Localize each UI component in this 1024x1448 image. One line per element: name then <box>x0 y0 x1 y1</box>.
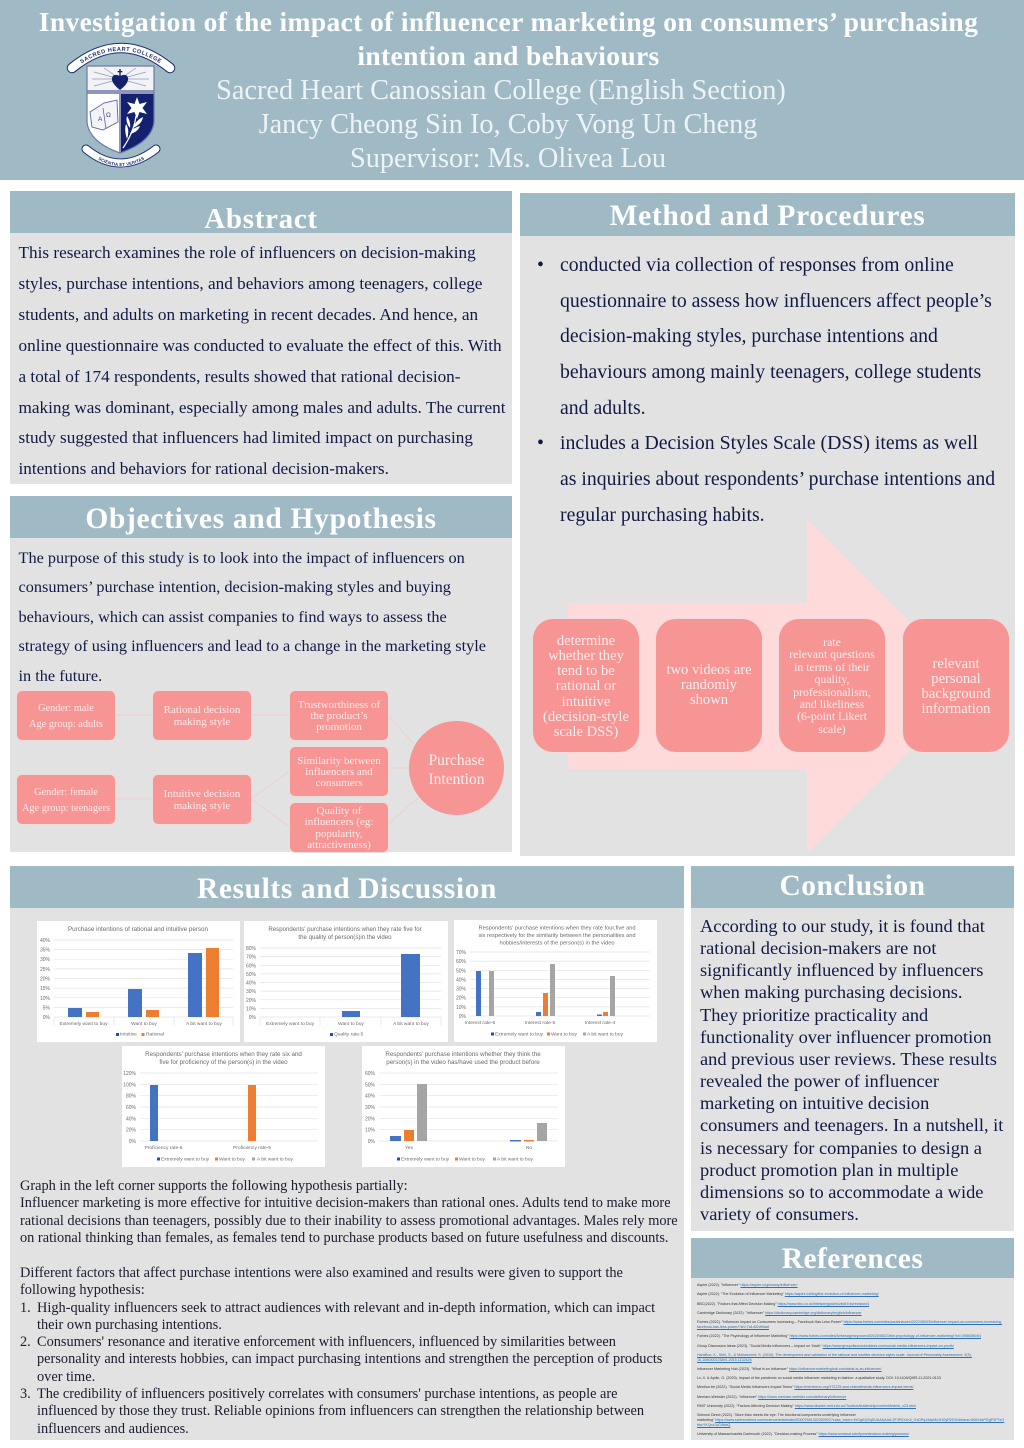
step: decision style scale: intuitive <box>562 694 610 710</box>
chart 3: similarity rate four, five, six: Extremely want to buy <box>495 1032 544 1038</box>
abstract heading <box>10 191 512 233</box>
chart 5: used the product before: 20% <box>365 1116 376 1122</box>
objectives heading <box>10 496 512 538</box>
box: quality of influencers: influencers (eg: <box>305 816 373 828</box>
box: gender male, adults <box>17 691 115 740</box>
conclusion text: They prioritize practicality and <box>700 1005 928 1025</box>
results list: influenced by those they trust. Reliable opinions from influencers can strengthen the relationship between <box>37 1403 644 1419</box>
box: quality of influencers: popularity, <box>315 828 363 840</box>
results text: first hypothesis <box>20 1178 678 1298</box>
results text: first hypothesis: Graph in the left corner supports the following hypothesis partially: <box>20 1178 408 1194</box>
results list: their own purchasing intentions. <box>37 1317 222 1333</box>
chart 1: rational vs intuitive: A bit want to buy <box>186 1021 222 1027</box>
abstract text: This research examines the role of influencers on decision-making <box>18 243 476 262</box>
chart 4: proficiency rate six and five: 100% <box>123 1082 137 1088</box>
method text: and adults. <box>560 397 646 419</box>
step: personal background: relevant <box>932 656 980 672</box>
conclusion text: functionality over influencer promotion <box>700 1027 992 1047</box>
results list: personality and interests hobbies, can impact purchasing intentions and strengthen the perception of products <box>37 1351 662 1367</box>
abstract text: a total of 174 respondents, results showed that rational decision- <box>18 367 460 386</box>
objectives text: strategy of using influencers and lead to a change in the marketing style <box>18 636 486 655</box>
step: rate relevant questions: relevant questions <box>789 647 875 661</box>
chart 1: rational vs intuitive: 10% <box>40 996 51 1002</box>
abstract text: online questionnaire was conducted to evaluate the effect of this. With <box>18 336 502 355</box>
panel: abstract <box>10 191 512 484</box>
results text: first hypothesis: Different factors that affect purchase intentions were also examined and results were given to support the <box>20 1265 623 1281</box>
shield: Ω <box>106 112 111 119</box>
conclusion text: marketing on intuitive decision <box>700 1093 929 1113</box>
chart 3: similarity rate four, five, six: A bit want to buy <box>587 1032 623 1038</box>
step: decision style scale: whether they <box>548 648 624 664</box>
box: quality of influencers: Quality of <box>317 805 361 817</box>
step: two videos: shown <box>690 692 728 708</box>
chart 1: rational vs intuitive: 15% <box>40 986 51 992</box>
chart 3: similarity rate four, five, six: Interest rate-5 <box>525 1020 555 1026</box>
step: decision style scale <box>533 619 639 752</box>
objectives heading: Objectives and Hypothesis <box>85 503 437 535</box>
references list: marketing" https://www.sciencedirect.com/science/article/abs/S0007681320300902?casa_token=KrDgKQSqDUAAAAAA:2F3P0X4rJi_GzDPqJ4dpMz1HOyR2DXvbhaxzo3KtiV4aPGgP3P7xG <box>697 1418 1004 1422</box>
box: rational decision making style: making style <box>174 716 230 728</box>
circle: purchase intention: Purchase <box>429 752 484 768</box>
conclusion text: According to our study, it is found that <box>700 916 985 936</box>
chart 5: used the product before: 50% <box>365 1082 376 1088</box>
results heading: Results and Discussion <box>197 873 497 905</box>
chart 1: rational vs intuitive: Purchase intentions of rational and intuitive person <box>68 926 209 933</box>
objectives text <box>18 548 486 685</box>
box: intuitive decision making style: making style <box>174 800 230 812</box>
chart 2: quality of person rate five: Respondents' purchase intentions when they rate five for <box>268 926 422 933</box>
results list numbers <box>20 1300 31 1402</box>
poster title <box>39 6 978 71</box>
chart 2: quality of person rate five: 30% <box>246 989 257 995</box>
panel: conclusion <box>691 866 1014 1231</box>
references heading <box>691 1238 1014 1278</box>
box: similarity <box>290 747 388 796</box>
chart 5: used the product before: No <box>526 1145 532 1151</box>
conclusion text: variety of consumers. <box>700 1204 859 1224</box>
step: decision style scale: tend to be <box>557 663 615 679</box>
chart 1: rational vs intuitive: Rational <box>146 1032 164 1038</box>
chart 5: used the product before: 60% <box>365 1071 376 1077</box>
step: rate relevant questions: scale) <box>818 722 846 736</box>
box: intuitive decision making style: Intuitive decision <box>164 788 240 800</box>
references list: Influencer Marketing Hub (2023). "What is an Influencer" https://influencermarketinghub.com/what-is-an-influencer/ <box>697 1367 882 1371</box>
chart 4: proficiency rate six and five: Extremely want to buy <box>161 1156 210 1162</box>
shield <box>87 66 154 156</box>
box: similarity: consumers <box>315 777 363 789</box>
chart 4: proficiency rate six and five: 80% <box>126 1094 137 1100</box>
chart 5: used the product before: 40% <box>365 1094 376 1100</box>
box: gender female, teenagers <box>17 775 115 824</box>
box: gender male, adults: Gender: male <box>38 703 94 714</box>
box: intuitive decision making style <box>153 775 251 824</box>
chart 2: quality of person rate five <box>244 921 448 1042</box>
conclusion heading <box>691 866 1014 908</box>
abstract text: making was dominant, especially among males and adults. The current <box>18 398 506 417</box>
results list: Consumers' resonance and iterative enforcement with influencers, influenced by similarities between <box>37 1334 616 1350</box>
step: decision style scale: scale DSS) <box>554 724 618 740</box>
college, authors and supervisor <box>216 74 786 174</box>
chart 1: rational vs intuitive: 25% <box>40 967 51 973</box>
step: decision style scale: (decision-style <box>543 709 629 725</box>
chart 5: used the product before <box>362 1046 565 1167</box>
panel: method and procedures <box>520 193 1015 856</box>
references list: 16-1080/00223891.2015.1132426 <box>697 1358 752 1362</box>
references list: bbcYKQcz2yG4bwQ <box>697 1423 730 1427</box>
chart 4: proficiency rate six and five: Proficiency rate-5 <box>233 1145 271 1151</box>
chart 2: quality of person rate five: 0% <box>249 1015 257 1021</box>
box: quality of influencers: attractiveness) <box>307 839 371 851</box>
step: rate relevant questions: and likeliness <box>800 697 864 711</box>
panel: results and discussion <box>10 866 684 1440</box>
step: two videos: randomly <box>681 677 737 693</box>
box: trustworthiness: promotion <box>316 721 362 733</box>
poster title: Investigation of the impact of influencer marketing on consumers’ purchasing <box>39 6 978 37</box>
box: gender female, teenagers: Age group: teenagers <box>22 802 110 814</box>
chart 5: used the product before: 0% <box>368 1139 376 1145</box>
conclusion text: dimensions so to accommodate a wide <box>700 1182 983 1202</box>
abstract text: students, and adults on marketing in recent decades. And hence, an <box>18 305 478 324</box>
results text: first hypothesis: rational decisions than teenagers, possibly due to their inability to assess promotional advantages. Males rely more <box>20 1213 678 1229</box>
step: personal background: personal <box>931 671 981 687</box>
results text: first hypothesis: following hypothesis: <box>20 1282 145 1298</box>
arrow: procedure flow <box>568 519 911 853</box>
results list numbers: 2. <box>20 1334 31 1350</box>
abstract heading: Abstract <box>204 203 318 235</box>
box: similarity: Similarity between <box>297 755 381 767</box>
box: rational decision making style: Rational decision <box>164 704 240 716</box>
chart 4: proficiency rate six and five: 60% <box>126 1105 137 1111</box>
chart 4: proficiency rate six and five: five for proficiency of the person(s) in the video <box>159 1059 288 1066</box>
conclusion text: product promotion plan in multiple <box>700 1160 958 1180</box>
chart 1: rational vs intuitive: 0% <box>43 1015 51 1021</box>
chart 3: similarity rate four, five, six: 50% <box>456 968 467 974</box>
conclusion text: rational decision-makers are not <box>700 938 936 958</box>
references list: Lv, X. & Aydin, G. (2023). Impact of the pandemic on social media influencer marketing in fashion: a qualitative study. DOI: 10.1108/QMR-11-2021-0133 <box>697 1376 941 1380</box>
references list: Hamilton, K., Shih, S., & Mohammed, S. (2016). The development and validation of the rational and intuitive decision styles scale. Journal of Personality Assessment, 3(3), <box>697 1353 972 1357</box>
step: rate relevant questions: rate <box>823 635 841 649</box>
results heading <box>10 866 684 908</box>
references list: facebook-has-less-power/?sh=7a1d02d9dad <box>697 1325 769 1329</box>
method bullets: • <box>537 254 544 276</box>
chart 4: proficiency rate six and five: 120% <box>123 1071 137 1077</box>
chart 2: quality of person rate five: 50% <box>246 972 257 978</box>
references list: Cambridge Dictionary (2022). "Influencer" https://dictionary.cambridge.org/dictionary/english/influencer <box>697 1311 862 1315</box>
references list: Aspire (2022). "The Evolution of Influencer Marketing" https://aspire.io/blog/the-evolution-of-influencer-marketing/ <box>697 1292 879 1296</box>
results list numbers: 3. <box>20 1386 31 1402</box>
panel: objectives and hypothesis <box>10 496 512 852</box>
chart 3: similarity rate four, five, six: six respectively for the similarity between the personalities and <box>478 933 636 939</box>
step: decision style scale: determine <box>557 633 615 649</box>
chart 3: similarity rate four, five, six: 70% <box>456 950 467 956</box>
icon: college crest: SACRED HEART COLLEGE <box>80 46 162 64</box>
poster title: intention and behaviours <box>357 40 660 71</box>
panel: references <box>691 1238 1014 1440</box>
step: rate relevant questions: (6-point Likert <box>797 709 867 723</box>
step: rate relevant questions <box>779 619 885 752</box>
chart 4: proficiency rate six and five <box>122 1046 325 1167</box>
top ribbon <box>72 48 170 68</box>
objectives text: The purpose of this study is to look into the impact of influencers on <box>18 548 465 567</box>
method heading <box>520 193 1015 236</box>
step: rate relevant questions: professionalism, <box>793 684 871 698</box>
method heading: Method and Procedures <box>610 200 925 232</box>
chart 3: similarity rate four, five, six: hobbies/interests of the person(s) in the video <box>499 940 615 946</box>
conclusion text: significantly influenced by influencers <box>700 960 983 980</box>
chart 5: used the product before: person(s) in the video has/have used the product before <box>386 1059 540 1066</box>
chart 5: used the product before: Extremely want to buy <box>401 1156 450 1162</box>
chart 4: proficiency rate six and five: Respondents' purchase intentions when they rate six and <box>145 1051 302 1058</box>
chart 4: proficiency rate six and five: Want to buy <box>219 1156 245 1162</box>
references list: Forbes (2022). "The Psychology of Influencer Marketing" https://www.forbes.com/sites/forbesagencycouncil/2020/08/21/the-psychology-of-influencer-marketing/?sh=39863f5c64 <box>697 1334 981 1338</box>
chart 2: quality of person rate five: Quality rate-5 <box>334 1032 364 1038</box>
shield: A <box>98 116 103 123</box>
results list: High-quality influencers seek to attract audiences with relevant and in-depth information, which can impact <box>37 1300 655 1316</box>
circle: purchase intention <box>409 721 504 815</box>
box: similarity: influencers and <box>305 766 373 778</box>
chart 3: similarity rate four, five, six <box>454 920 657 1042</box>
abstract text: study suggested that influencers had limited impact on purchasing <box>18 428 473 447</box>
college, authors and supervisor: Jancy Cheong Sin Io, Coby Vong Un Cheng <box>259 108 757 140</box>
results list: The credibility of influencers positively correlates with consumers' purchase intentions, as people are <box>37 1386 618 1402</box>
chart 1: rational vs intuitive: Want to buy <box>131 1021 158 1027</box>
icon: college crest: SCIENTIA ET VERITAS <box>98 156 144 166</box>
box: quality of influencers <box>290 803 388 852</box>
chart 4: proficiency rate six and five: 0% <box>129 1139 137 1145</box>
method text <box>560 254 995 526</box>
step: personal background: background <box>922 686 990 702</box>
chart 1: rational vs intuitive: 35% <box>40 948 51 954</box>
references list: University of Massachusetts Dartmouth (2022). "Decision-making Process" https://www.umassd.edu/fycm/decision-making/process/ <box>697 1432 909 1436</box>
results list <box>37 1300 662 1437</box>
chart 2: quality of person rate five: 10% <box>246 1006 257 1012</box>
chart 2: quality of person rate five: 40% <box>246 980 257 986</box>
chart 5: used the product before: 10% <box>365 1128 376 1134</box>
references list: Group Discussion Ideas (2023). "Social Media Influencers – Impact on Youth" https://www.groupdiscussionideas.com/social-media-influencers-impact-on-youth/ <box>697 1344 954 1348</box>
conclusion text: is necessary for companies to design a <box>700 1138 982 1158</box>
chart 1: rational vs intuitive: 5% <box>43 1005 51 1011</box>
chart 1: rational vs intuitive <box>37 921 240 1042</box>
chart 2: quality of person rate five: Want to buy <box>338 1021 365 1027</box>
step: personal background <box>903 619 1009 752</box>
step: two videos <box>656 619 762 752</box>
step: rate relevant questions: quality, <box>815 672 849 686</box>
college, authors and supervisor: Supervisor: Ms. Olivea Lou <box>350 142 666 174</box>
results text: first hypothesis: Influencer marketing is more effective for intuitive decision-makers than rational ones. Adults tend to make more <box>20 1195 671 1211</box>
chart 4: proficiency rate six and five: Proficiency rate-6 <box>144 1145 183 1151</box>
box: trustworthiness: Trustworthiness of <box>298 699 380 711</box>
icon: college crest <box>66 42 176 168</box>
chart 4: proficiency rate six and five: 40% <box>126 1116 137 1122</box>
results list: over time. <box>37 1369 95 1385</box>
references list: Mention.be (2022). "Social Media Influencers Impact Teens" https://mentionxx.org/372225-and-chiaraltmedia-influencers-impact-teens/ <box>697 1385 913 1389</box>
chart 3: similarity rate four, five, six: Interest rate-6 <box>465 1020 495 1026</box>
method text: as inquiries about respondents’ purchase intentions and <box>560 468 995 490</box>
references list: Aspire (2022). "Influencer" https://aspire.io/glossary/influencer/ <box>697 1282 798 1286</box>
conclusion text <box>700 916 1004 1224</box>
references list: Merriam-Webster (2022). "Influencer" https://www.merriam-webster.com/dictionary/influencer <box>697 1395 846 1399</box>
objectives text: consumers’ purchase intention, decision-making styles and buying <box>18 577 451 596</box>
chart 5: used the product before: A bit want to buy <box>497 1156 533 1162</box>
method bullets: • <box>537 432 544 454</box>
chart 5: used the product before: 30% <box>365 1105 376 1111</box>
conclusion text: revealed the power of influencer <box>700 1071 939 1091</box>
chart 3: similarity rate four, five, six: 20% <box>456 996 467 1002</box>
bottom ribbon <box>86 149 156 163</box>
chart 5: used the product before: Yes <box>405 1145 414 1151</box>
chart 2: quality of person rate five: 20% <box>246 998 257 1004</box>
chart 2: quality of person rate five: A bit want to buy <box>393 1021 429 1027</box>
chart 3: similarity rate four, five, six: 10% <box>456 1005 467 1011</box>
chart 2: quality of person rate five: Extremely want to buy <box>266 1021 315 1027</box>
step: decision style scale: rational or <box>556 678 616 694</box>
box: trustworthiness <box>290 691 388 740</box>
objectives text: behaviours, which can assist companies to find ways to assess the <box>18 607 447 626</box>
chart 3: similarity rate four, five, six: 30% <box>456 987 467 993</box>
chart 4: proficiency rate six and five: 20% <box>126 1128 137 1134</box>
chart 3: similarity rate four, five, six: 40% <box>456 977 467 983</box>
method text: conducted via collection of responses from online <box>560 254 954 276</box>
chart 2: quality of person rate five: the quality of person(s)in the video <box>298 934 392 941</box>
method text: regular purchasing habits. <box>560 504 765 526</box>
box: gender male, adults: Age group: adults <box>29 718 103 730</box>
chart 3: similarity rate four, five, six: 0% <box>459 1014 467 1020</box>
method text: decision-making styles, purchase intentions and <box>560 325 938 347</box>
references list: RMIT University (2022). "Factors Affecting Decision Making" https://www.dlsweb.rmit.edu.au/Toolbox/leadership/content/bsbldr_z23.html <box>697 1404 916 1408</box>
college, authors and supervisor: Sacred Heart Canossian College (English Section) <box>216 74 786 106</box>
chart 1: rational vs intuitive: Extremely want to buy <box>59 1021 108 1027</box>
references list: Science Direct (2022). "More than meets the eye: The functional components underlying influencer <box>697 1413 856 1417</box>
step: two videos: two videos are <box>666 662 752 678</box>
objectives text: in the future. <box>18 666 102 685</box>
chart 1: rational vs intuitive: 40% <box>40 938 51 944</box>
references list: BBC(2022). "Factors that Affect Decision Making" https://www.bbc.co.uk/bitesize/guides/zkbk7nb/revision/4 <box>697 1302 869 1306</box>
header banner <box>0 0 1024 180</box>
step: rate relevant questions: in terms of their <box>794 660 870 674</box>
circle: purchase intention: Intention <box>429 770 484 788</box>
chart 3: similarity rate four, five, six: 60% <box>456 959 467 965</box>
abstract text: intentions and behaviors for rational decision-makers. <box>18 459 389 478</box>
box: gender female, teenagers: Gender: female <box>34 787 98 798</box>
chart 2: quality of person rate five: 60% <box>246 963 257 969</box>
chart 3: similarity rate four, five, six: Interest rate-4 <box>585 1020 615 1026</box>
method text: behaviours among mainly teenagers, college students <box>560 361 981 383</box>
chart 3: similarity rate four, five, six: Want to buy <box>551 1032 577 1038</box>
conclusion text: consumers and teenagers. In a nutshell, it <box>700 1115 1003 1135</box>
method bullets <box>537 254 544 454</box>
results text: first hypothesis: on rational thinking than females, as females tend to purchase products based on future usefulness and discounts. <box>20 1230 668 1246</box>
conclusion text: when making purchasing decisions. <box>700 982 963 1002</box>
chart 3: similarity rate four, five, six: Respondents' purchase intentions when they rate four,five and <box>479 926 635 932</box>
chart 1: rational vs intuitive: 30% <box>40 957 51 963</box>
chart 5: used the product before: Want to buy <box>459 1156 485 1162</box>
chart 1: rational vs intuitive: Intuitive <box>120 1032 137 1038</box>
chart 1: rational vs intuitive: 20% <box>40 976 51 982</box>
references list: Forbes (2022). "Influencer Impact on Consumers Increasing – Facebook Has Less Power" https://www.forbes.com/sites/paularlauren/2022/06/03/influencer-impact-on-consumers-increasing- <box>697 1320 1002 1324</box>
chart 5: used the product before: Respondents' purchase intentions whether they think the <box>385 1051 541 1058</box>
chart 2: quality of person rate five: 80% <box>246 946 257 952</box>
references heading: References <box>782 1243 923 1275</box>
results list numbers: 1. <box>20 1300 31 1316</box>
results list: influencers and audiences. <box>37 1421 189 1437</box>
hypothesis connector lines <box>116 714 418 827</box>
chart 4: proficiency rate six and five: A bit want to buy <box>257 1156 293 1162</box>
method text: includes a Decision Styles Scale (DSS) items as well <box>560 432 978 454</box>
conclusion text: and previous user reviews. These results <box>700 1049 997 1069</box>
step: personal background: information <box>922 701 990 717</box>
conclusion heading: Conclusion <box>780 870 926 902</box>
box: rational decision making style <box>153 691 251 740</box>
method text: questionnaire to assess how influencers affect people’s <box>560 290 992 312</box>
abstract text: styles, purchase intentions, and behaviors among teenagers, college <box>18 274 482 293</box>
box: trustworthiness: the product’s <box>310 710 368 722</box>
chart 2: quality of person rate five: 70% <box>246 955 257 961</box>
abstract text <box>18 243 506 478</box>
